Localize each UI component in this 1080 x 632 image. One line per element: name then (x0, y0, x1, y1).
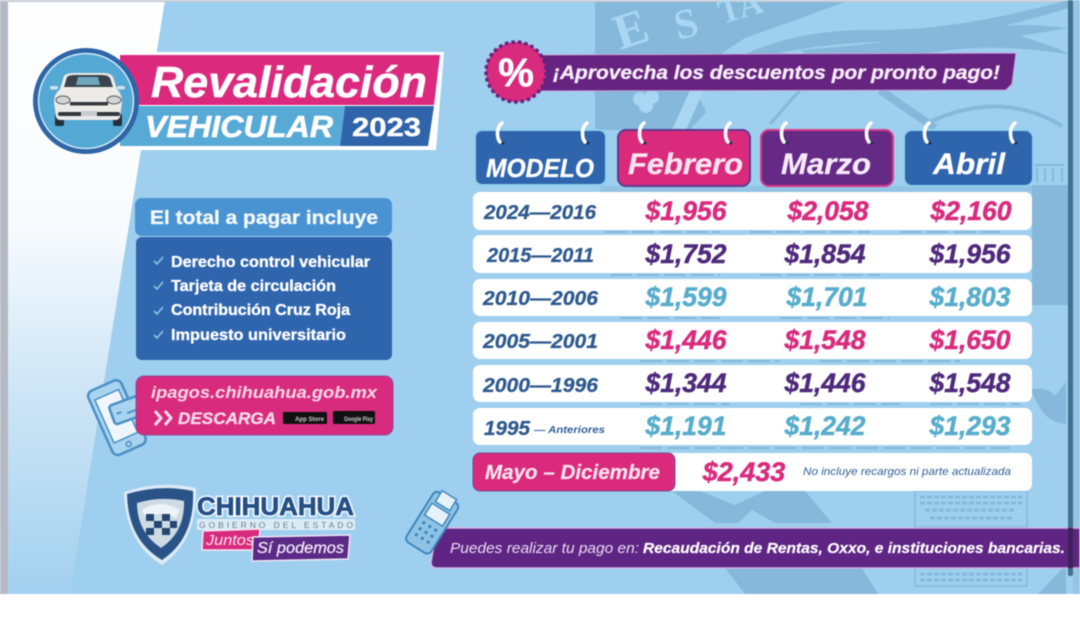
watermark dashes between rows (605, 232, 1020, 448)
watermark letters (606, 0, 768, 130)
icon: shield (124, 485, 196, 565)
row 2010-2006: $1,599 (644, 282, 727, 312)
dark edge strip (1068, 0, 1073, 576)
panel list: Derecho control vehicular (171, 254, 370, 271)
payment banner: Puedes realizar tu pago en: (450, 540, 639, 557)
panel heading (135, 198, 392, 236)
slogan: Sí podemos (257, 540, 344, 557)
icon: percent badge (486, 42, 546, 102)
icon: card terminal (404, 487, 462, 555)
row 1995-anteriores: $1,191 (644, 411, 727, 441)
panel list: Impuesto universitario (171, 327, 346, 344)
header: Marzo (761, 123, 893, 186)
row 2000-1996 (473, 365, 1032, 402)
discount banner (486, 42, 1016, 102)
watermark building (915, 491, 1027, 586)
panel list: Tarjeta de circulación (171, 278, 336, 295)
row 2015-2011: $1,752 (644, 239, 727, 269)
title band: Vehicular 2023 (120, 106, 434, 146)
table headers (475, 123, 1033, 186)
Google Play badge: Google Play (344, 417, 374, 423)
title band: Revalidación: Revalidación (151, 58, 427, 107)
header: Abril (904, 123, 1033, 186)
watermark: state seal (595, 0, 1068, 594)
download banner: ipagos.chihuahua.gob.mx (151, 383, 379, 402)
header: Febrero: Febrero (628, 148, 743, 181)
row Mayo-Diciembre (473, 453, 1032, 491)
row 1995-anteriores: 1995 (484, 418, 531, 440)
slogan (202, 529, 350, 561)
right edge strip (1073, 0, 1080, 594)
row 2015-2011: $1,854 (783, 239, 866, 269)
icon: phone with card (86, 378, 148, 457)
title band: Vehicular 2023: VEHICULAR (145, 109, 334, 144)
row Mayo-Diciembre: $2,433 (702, 457, 785, 487)
row 1995-anteriores: $1,242 (783, 411, 866, 441)
download banner: DESCARGA (178, 409, 276, 428)
row 2024-2016: 2024—2016 (483, 202, 597, 224)
header: Marzo: Marzo (781, 148, 871, 181)
row 2000-1996: $1,548 (928, 368, 1011, 398)
row Mayo-Diciembre: Mayo – Diciembre (485, 461, 660, 484)
download arrows (155, 411, 171, 425)
price table (473, 192, 1032, 491)
row 1995-anteriores (473, 408, 1032, 445)
header: Febrero (618, 123, 750, 186)
download banner (136, 376, 393, 435)
row 2005-2001: $1,650 (928, 325, 1011, 355)
App Store badge (283, 412, 327, 424)
row 2024-2016: $2,058 (786, 196, 869, 226)
logo: Chihuahua government: CHIHUAHUA (197, 493, 354, 521)
row 1995-anteriores: $1,293 (928, 411, 1011, 441)
row 2024-2016: $2,160 (929, 196, 1012, 226)
panel list: Contribución Cruz Roja (171, 302, 350, 319)
row 2010-2006: 2010—2006 (482, 288, 599, 310)
row 2005-2001: $1,548 (783, 325, 866, 355)
row 2000-1996: 2000—1996 (482, 375, 599, 397)
row Mayo-Diciembre: No incluye recargos ni parte actualizada (803, 466, 1011, 478)
slogan: Juntos (205, 532, 255, 549)
row 2000-1996: $1,446 (783, 368, 866, 398)
Google Play badge (333, 411, 375, 424)
logo: Chihuahua government (124, 485, 355, 565)
payment banner: Recaudación de Rentas, Oxxo, e instituciones bancarias. (643, 540, 1065, 557)
App Store badge: App Store (295, 416, 324, 423)
row 2015-2011: $1,956 (928, 239, 1011, 269)
header: Modelo: MODELO (486, 153, 594, 183)
logo: Chihuahua government: CHIHUAHUA (197, 493, 354, 521)
discount banner: ¡Aprovecha los descuentos por pronto pago! (553, 63, 1000, 84)
row 2010-2006: $1,803 (928, 282, 1011, 312)
title banner (120, 52, 444, 150)
row 2024-2016: $1,956 (644, 196, 727, 226)
icon: percent badge: % (498, 51, 534, 95)
panel heading: El total a pagar incluye (150, 207, 378, 229)
panel list (136, 237, 392, 360)
header: Abril: Abril (932, 148, 1006, 181)
row 2010-2006: $1,701 (785, 282, 868, 312)
icon: car badge (33, 48, 139, 154)
row 2015-2011: 2015—2011 (486, 245, 594, 267)
row 1995-anteriores: — Anteriores (533, 424, 605, 436)
row 2010-2006 (473, 279, 1032, 316)
row 2005-2001: 2005—2001 (482, 331, 598, 353)
title band: Vehicular 2023: 2023 (352, 112, 421, 142)
header: Modelo (475, 123, 606, 185)
row 2005-2001 (473, 322, 1032, 359)
watermark letters: S (669, 0, 703, 50)
logo subtitle: GOBIERNO DEL ESTADO (199, 520, 353, 530)
row 2024-2016 (473, 192, 1032, 230)
payment banner (431, 528, 1080, 568)
panel: total a pagar (135, 198, 392, 360)
row 2015-2011 (473, 235, 1032, 273)
row 2000-1996: $1,344 (644, 368, 727, 398)
row 2005-2001: $1,446 (644, 325, 727, 355)
